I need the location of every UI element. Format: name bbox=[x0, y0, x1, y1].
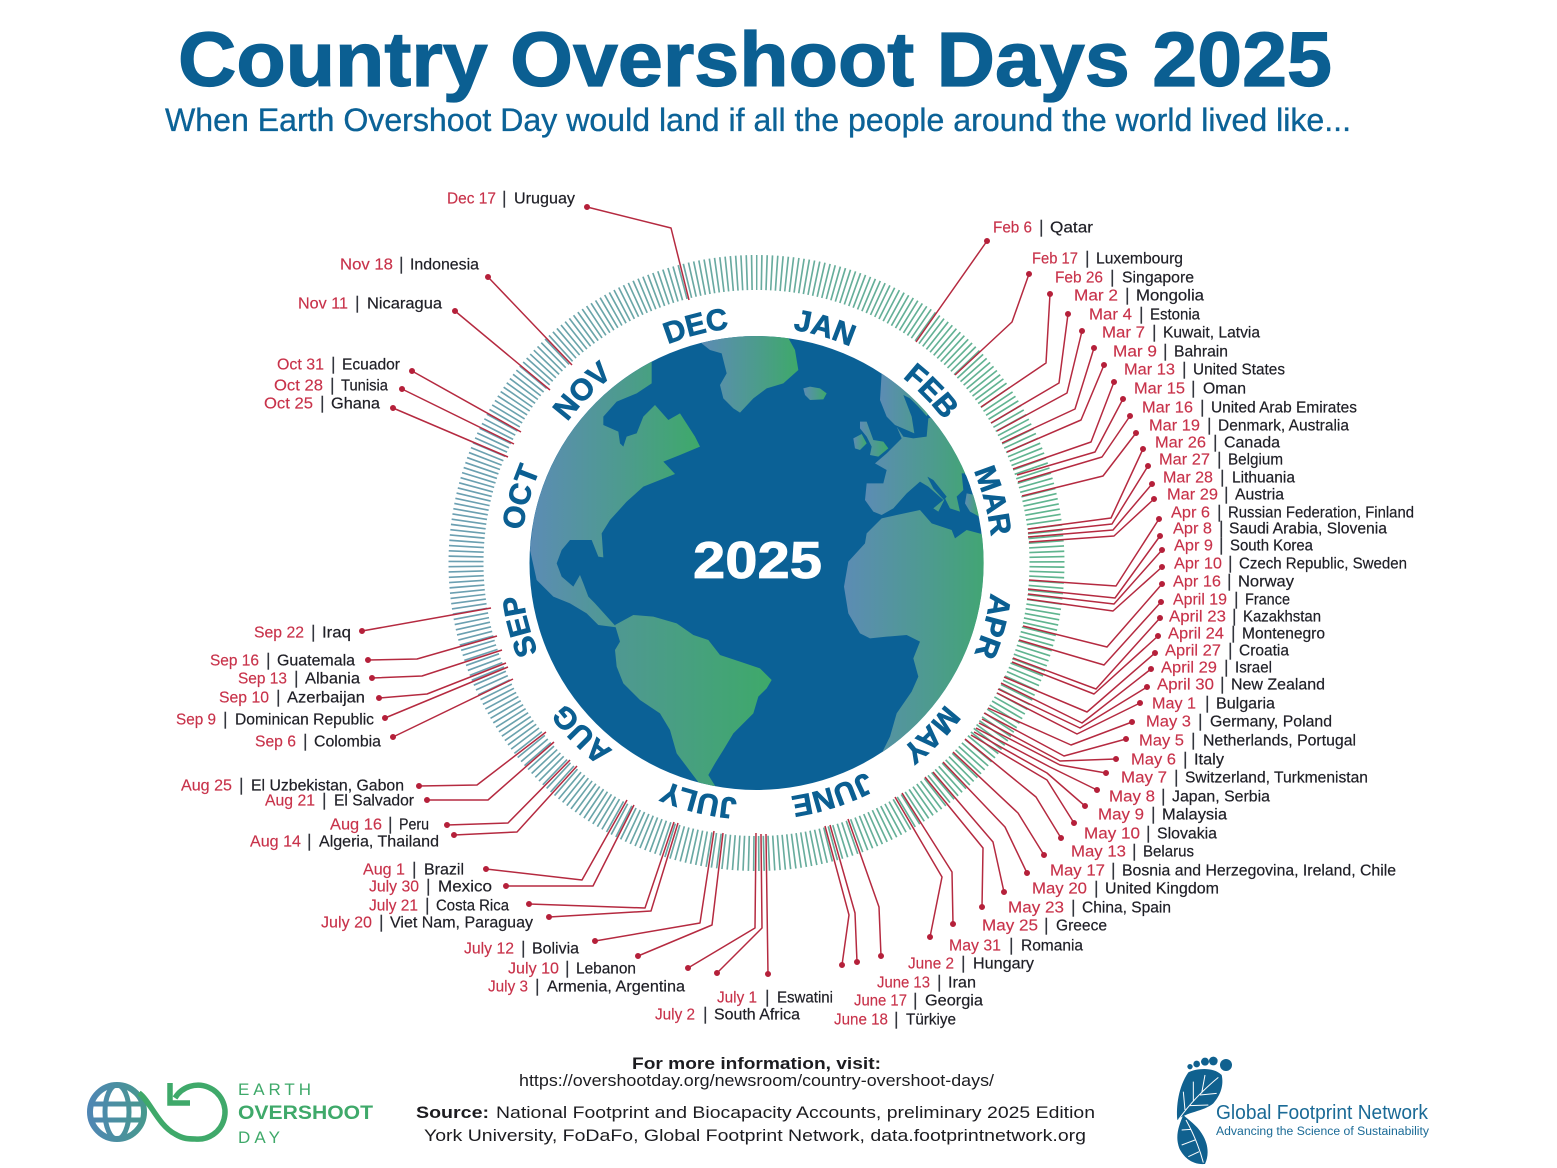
month: DEC: DEC bbox=[662, 308, 728, 344]
label: Sep 6 Colombia bbox=[255, 734, 381, 751]
sea: Adriatic bbox=[927, 477, 947, 500]
footer: more information: For more information, visit: bbox=[632, 1054, 881, 1073]
label: May 17 Bosnia and Herzegovina, Ireland, Chile: Bosnia and Herzegovina, Ireland, Chile bbox=[1122, 863, 1396, 880]
label: Sep 9 Dominican Republic: Dominican Republic bbox=[235, 712, 374, 729]
label: Mar 28 Lithuania bbox=[1163, 470, 1295, 487]
label: Mar 13 United States bbox=[1124, 362, 1285, 379]
label: May 20 United Kingdom: United Kingdom bbox=[1105, 881, 1219, 898]
label: July 20 Viet Nam, Paraguay: July 20 bbox=[321, 915, 372, 932]
label: May 20 United Kingdom bbox=[1032, 881, 1219, 898]
continent: Greenland bbox=[702, 330, 798, 413]
continent: Africa bbox=[844, 510, 984, 752]
label: July 2 South Africa: July 2 bbox=[655, 1007, 695, 1024]
label: Oct 28 Tunisia: Tunisia bbox=[341, 378, 388, 395]
label: April 27 Croatia: April 27 bbox=[1165, 643, 1221, 660]
label: Sep 16 Guatemala: Guatemala bbox=[277, 653, 355, 670]
label: Aug 25 El Uzbekistan, Gabon: El Uzbekistan, Gabon bbox=[251, 778, 404, 795]
label: Mar 9 Bahrain: Mar 9 bbox=[1113, 344, 1157, 361]
label: Dec 17 Uruguay: Dec 17 bbox=[447, 191, 496, 208]
label: Dec 17 Uruguay: Uruguay bbox=[514, 191, 575, 208]
label: Feb 26 Singapore: Feb 26 bbox=[1055, 270, 1103, 287]
label: July 12 Bolivia bbox=[464, 941, 579, 958]
label: May 7 Switzerland, Turkmenistan: Switzerland, Turkmenistan bbox=[1185, 770, 1368, 787]
month: OCT: OCT bbox=[503, 462, 538, 528]
label: July 30 Mexico: July 30 bbox=[369, 879, 419, 896]
label: Mar 19 Denmark, Australia bbox=[1149, 418, 1349, 435]
label: July 3 Armenia, Argentina: July 3 bbox=[488, 979, 528, 996]
footer: more information: https://overshootday.org/newsroom/country-overshoot-days/ bbox=[519, 1071, 994, 1090]
label: May 3 Germany, Poland: Germany, Poland bbox=[1210, 714, 1332, 731]
label: Mar 2 Mongolia: Mongolia bbox=[1136, 288, 1204, 305]
year label: 2025 bbox=[693, 532, 822, 590]
label: Oct 25 Ghana: Oct 25 bbox=[264, 396, 313, 413]
subtitle: When Earth Overshoot Day would land if all the people around the world lived like... bbox=[165, 102, 1351, 138]
label: Feb 17 Luxembourg: Feb 17 bbox=[1032, 251, 1078, 268]
month: JUNE: JUNE bbox=[791, 774, 870, 818]
label: May 6 Italy: Italy bbox=[1194, 752, 1224, 769]
label: Oct 31 Ecuador: Oct 31 bbox=[277, 357, 324, 374]
continent: Scandinavia bbox=[880, 374, 928, 434]
label: April 24 Montenegro bbox=[1168, 626, 1325, 643]
label: Mar 27 Belgium bbox=[1159, 452, 1283, 469]
label: May 31 Romania bbox=[949, 938, 1083, 955]
label: Sep 9 Dominican Republic bbox=[176, 712, 374, 729]
month: MAY: MAY bbox=[906, 705, 961, 766]
label: Sep 9 Dominican Republic: Sep 9 bbox=[176, 712, 216, 729]
label: May 7 Switzerland, Turkmenistan: May 7 bbox=[1121, 770, 1167, 787]
footer: source: National Footprint and Biocapacity Accounts, preliminary 2025 Edition bbox=[496, 1103, 1095, 1122]
logo wordmark bbox=[238, 1080, 373, 1147]
label: Sep 10 Azerbaijan: Sep 10 bbox=[219, 690, 269, 707]
label: Nov 11 Nicaragua: Nicaragua bbox=[367, 296, 442, 313]
label: Dec 17 Uruguay bbox=[447, 191, 575, 208]
continent: North America bbox=[530, 362, 700, 627]
logo: Global Footprint Network bbox=[1177, 1057, 1429, 1164]
label: May 5 Netherlands, Portugal: Netherlands, Portugal bbox=[1203, 733, 1356, 750]
label: July 21 Costa Rica bbox=[369, 898, 509, 915]
label: June 13 Iran bbox=[877, 975, 976, 992]
footer: source: Source: bbox=[416, 1103, 489, 1122]
label: July 10 Lebanon: July 10 bbox=[508, 961, 559, 978]
label: May 10 Slovakia: May 10 bbox=[1084, 826, 1140, 843]
label: Aug 25 El Uzbekistan, Gabon: Aug 25 bbox=[181, 778, 232, 795]
label: Sep 22 Iraq: Iraq bbox=[322, 625, 351, 642]
label: Apr 10 Czech Republic, Sweden: Apr 10 bbox=[1174, 556, 1222, 573]
label: Sep 10 Azerbaijan bbox=[219, 690, 365, 707]
label: June 2 Hungary: June 2 bbox=[908, 956, 954, 973]
label: Apr 6 Russian Federation, Finland: Russian Federation, Finland bbox=[1228, 505, 1414, 522]
label: April 19 France: France bbox=[1245, 592, 1290, 609]
land: Turkey bbox=[965, 493, 979, 517]
sea: Black Sea bbox=[966, 475, 971, 489]
label: May 8 Japan, Serbia: May 8 bbox=[1109, 789, 1155, 806]
label: June 2 Hungary: Hungary bbox=[973, 956, 1034, 973]
label: July 3 Armenia, Argentina: Armenia, Argentina bbox=[547, 979, 685, 996]
label: May 5 Netherlands, Portugal: May 5 bbox=[1139, 733, 1184, 750]
label: Sep 13 Albania bbox=[238, 671, 360, 688]
label: Aug 1 Brazil: Aug 1 bbox=[363, 862, 405, 879]
label: Apr 16 Norway bbox=[1173, 574, 1294, 591]
label: July 21 Costa Rica: Costa Rica bbox=[436, 898, 509, 915]
label: July 2 South Africa bbox=[655, 1007, 800, 1024]
label: April 19 France bbox=[1173, 592, 1290, 609]
label: Mar 29 Austria: Austria bbox=[1235, 487, 1284, 504]
label: May 8 Japan, Serbia: Japan, Serbia bbox=[1172, 789, 1270, 806]
label: April 27 Croatia: Croatia bbox=[1239, 643, 1289, 660]
month: APR: APR bbox=[974, 593, 1010, 658]
label: Mar 7 Kuwait, Latvia: Mar 7 bbox=[1102, 325, 1145, 342]
label: July 1 Eswatini: July 1 bbox=[717, 990, 757, 1007]
footer: source bbox=[416, 1103, 1095, 1145]
label: Aug 21 El Salvador: Aug 21 bbox=[265, 793, 315, 810]
label: May 9 Malaysia bbox=[1098, 807, 1227, 824]
label: July 1 Eswatini bbox=[717, 990, 833, 1007]
label: Nov 18 Indonesia: Nov 18 bbox=[340, 257, 393, 274]
continent: Europe bbox=[865, 418, 966, 515]
label: Mar 7 Kuwait, Latvia bbox=[1102, 325, 1260, 342]
label: Feb 17 Luxembourg bbox=[1032, 251, 1183, 268]
label: June 2 Hungary bbox=[908, 956, 1034, 973]
label: Mar 26 Canada bbox=[1155, 435, 1280, 452]
label: May 13 Belarus: May 13 bbox=[1071, 844, 1126, 861]
label: May 1 Bulgaria: May 1 bbox=[1152, 696, 1196, 713]
label: Mar 19 Denmark, Australia: Denmark, Australia bbox=[1218, 418, 1349, 435]
label: Mar 15 Oman: Mar 15 bbox=[1134, 381, 1185, 398]
label: April 23 Kazakhstan: April 23 bbox=[1169, 609, 1226, 626]
label: Sep 6 Colombia: Colombia bbox=[314, 734, 381, 751]
island: Ireland bbox=[853, 434, 867, 450]
label: Mar 9 Bahrain bbox=[1113, 344, 1228, 361]
label: Mar 16 United Arab Emirates bbox=[1142, 400, 1357, 417]
label: May 6 Italy bbox=[1131, 752, 1224, 769]
label: Mar 4 Estonia: Estonia bbox=[1150, 307, 1200, 324]
globe bbox=[530, 330, 1003, 790]
label: April 19 France: April 19 bbox=[1173, 592, 1227, 609]
logo tagline: Advancing the Science of Sustainability bbox=[1216, 1126, 1429, 1138]
label: June 13 Iran: June 13 bbox=[877, 975, 930, 992]
label: Mar 19 Denmark, Australia: Mar 19 bbox=[1149, 418, 1200, 435]
label: Feb 6 Qatar: Feb 6 bbox=[993, 220, 1032, 237]
label: Apr 16 Norway: Apr 16 bbox=[1173, 574, 1221, 591]
label: Mar 13 United States: United States bbox=[1193, 362, 1285, 379]
logo wordmark: OVERSHOOT bbox=[238, 1103, 373, 1124]
label: Mar 4 Estonia bbox=[1089, 307, 1200, 324]
label: Aug 25 El Uzbekistan, Gabon bbox=[181, 778, 404, 795]
label: Apr 8 Saudi Arabia, Slovenia: Apr 8 bbox=[1173, 521, 1212, 538]
label: Feb 6 Qatar bbox=[993, 220, 1093, 237]
logo wordmark: EARTH bbox=[238, 1080, 311, 1099]
label: May 9 Malaysia: Malaysia bbox=[1162, 807, 1227, 824]
label: May 8 Japan, Serbia bbox=[1109, 789, 1270, 806]
label: Mar 28 Lithuania: Mar 28 bbox=[1163, 470, 1213, 487]
label: May 13 Belarus: Belarus bbox=[1143, 844, 1194, 861]
label: May 10 Slovakia bbox=[1084, 826, 1217, 843]
leader line end dots bbox=[362, 207, 1162, 974]
label: Mar 27 Belgium: Mar 27 bbox=[1159, 452, 1210, 469]
label: April 23 Kazakhstan bbox=[1169, 609, 1321, 626]
label: May 9 Malaysia: May 9 bbox=[1098, 807, 1144, 824]
label: Sep 13 Albania: Sep 13 bbox=[238, 671, 287, 688]
label: May 31 Romania: May 31 bbox=[949, 938, 1001, 955]
label: Mar 15 Oman: Oman bbox=[1203, 381, 1246, 398]
label: Mar 28 Lithuania: Lithuania bbox=[1232, 470, 1295, 487]
label: April 23 Kazakhstan: Kazakhstan bbox=[1243, 609, 1321, 626]
label: April 27 Croatia bbox=[1165, 643, 1289, 660]
label: Sep 10 Azerbaijan: Azerbaijan bbox=[287, 690, 365, 707]
label: Aug 21 El Salvador bbox=[265, 793, 414, 810]
label: Sep 16 Guatemala: Sep 16 bbox=[210, 653, 259, 670]
label: June 17 Georgia bbox=[854, 993, 983, 1010]
label: Mar 16 United Arab Emirates: United Arab Emirates bbox=[1211, 400, 1357, 417]
logo wordmark: Global Footprint Network bbox=[1216, 1102, 1429, 1124]
label: Nov 18 Indonesia: Indonesia bbox=[410, 257, 479, 274]
label: Aug 1 Brazil bbox=[363, 862, 464, 879]
label: Aug 14 Algeria, Thailand bbox=[250, 834, 439, 851]
logo wordmark: DAY bbox=[238, 1128, 280, 1147]
footer: source: York University, FoDaFo, Global Footprint Network, data.footprintnetwork.org bbox=[424, 1126, 1086, 1145]
label: Mar 27 Belgium: Belgium bbox=[1228, 452, 1283, 469]
logo icon: footprint leaf bbox=[1177, 1057, 1232, 1164]
label: Aug 16 Peru: Peru bbox=[399, 817, 429, 834]
month labels bbox=[503, 308, 1011, 818]
label: Oct 25 Ghana: Ghana bbox=[331, 396, 380, 413]
label: Aug 1 Brazil: Brazil bbox=[424, 862, 464, 879]
label: May 1 Bulgaria: Bulgaria bbox=[1216, 696, 1275, 713]
label: July 20 Viet Nam, Paraguay bbox=[321, 915, 533, 932]
label: Aug 14 Algeria, Thailand: Aug 14 bbox=[250, 834, 301, 851]
label: Aug 16 Peru bbox=[330, 817, 429, 834]
month: FEB: FEB bbox=[904, 362, 957, 417]
label: April 30 New Zealand bbox=[1157, 677, 1325, 694]
label: Feb 26 Singapore: Singapore bbox=[1122, 270, 1194, 287]
label: July 30 Mexico: Mexico bbox=[438, 879, 492, 896]
label: Apr 10 Czech Republic, Sweden: Czech Republic, Sweden bbox=[1239, 556, 1407, 573]
leader lines bbox=[362, 207, 1162, 974]
label: Sep 13 Albania: Albania bbox=[305, 671, 360, 688]
label: July 10 Lebanon: Lebanon bbox=[576, 961, 636, 978]
label: May 3 Germany, Poland: May 3 bbox=[1146, 714, 1191, 731]
label: Oct 25 Ghana bbox=[264, 396, 380, 413]
label: May 23 China, Spain: China, Spain bbox=[1082, 900, 1171, 917]
label: Nov 11 Nicaragua bbox=[298, 296, 442, 313]
continent: South America bbox=[615, 615, 772, 788]
label: July 2 South Africa: South Africa bbox=[714, 1007, 800, 1024]
label: Mar 4 Estonia: Mar 4 bbox=[1089, 307, 1132, 324]
label: Oct 28 Tunisia bbox=[274, 378, 388, 395]
label: April 29 Israel bbox=[1161, 660, 1272, 677]
label: May 23 China, Spain: May 23 bbox=[1008, 900, 1064, 917]
label: Oct 31 Ecuador: Ecuador bbox=[342, 357, 400, 374]
label: June 17 Georgia: June 17 bbox=[854, 993, 907, 1010]
label: May 31 Romania: Romania bbox=[1021, 938, 1083, 955]
label: Apr 9 South Korea bbox=[1174, 538, 1313, 555]
label: Nov 11 Nicaragua: Nov 11 bbox=[298, 296, 348, 313]
label: July 21 Costa Rica: July 21 bbox=[369, 898, 418, 915]
label: July 3 Armenia, Argentina bbox=[488, 979, 685, 996]
label: May 10 Slovakia: Slovakia bbox=[1157, 826, 1217, 843]
label: July 12 Bolivia: July 12 bbox=[464, 941, 514, 958]
label: Mar 2 Mongolia bbox=[1074, 288, 1204, 305]
label: May 3 Germany, Poland bbox=[1146, 714, 1332, 731]
date labels bbox=[176, 191, 1414, 1029]
label: Mar 2 Mongolia: Mar 2 bbox=[1074, 288, 1118, 305]
label: April 24 Montenegro: Montenegro bbox=[1242, 626, 1325, 643]
island: Iceland bbox=[803, 387, 827, 400]
label: Aug 14 Algeria, Thailand: Algeria, Thailand bbox=[319, 834, 439, 851]
label: Aug 16 Peru: Aug 16 bbox=[330, 817, 382, 834]
label: Mar 26 Canada: Canada bbox=[1224, 435, 1280, 452]
label: July 10 Lebanon bbox=[508, 961, 636, 978]
label: July 30 Mexico bbox=[369, 879, 492, 896]
label: Mar 13 United States: Mar 13 bbox=[1124, 362, 1175, 379]
logo icon: globe and infinity loop bbox=[90, 1083, 225, 1139]
label: Nov 18 Indonesia bbox=[340, 257, 479, 274]
label: May 25 Greece bbox=[982, 918, 1107, 935]
label: May 1 Bulgaria bbox=[1152, 696, 1275, 713]
month: SEP: SEP bbox=[503, 598, 536, 657]
logo: Earth Overshoot Day bbox=[90, 1080, 373, 1147]
label: Mar 16 United Arab Emirates: Mar 16 bbox=[1142, 400, 1193, 417]
month: AUG: AUG bbox=[554, 706, 613, 762]
label: Feb 26 Singapore bbox=[1055, 270, 1194, 287]
label: Oct 28 Tunisia: Oct 28 bbox=[274, 378, 323, 395]
label: April 30 New Zealand: New Zealand bbox=[1231, 677, 1325, 694]
label: Oct 31 Ecuador bbox=[277, 357, 400, 374]
footer: more information bbox=[519, 1054, 994, 1090]
label: Feb 6 Qatar: Qatar bbox=[1050, 220, 1093, 237]
label: Sep 22 Iraq bbox=[254, 625, 351, 642]
label: Sep 22 Iraq: Sep 22 bbox=[254, 625, 304, 642]
label: June 18 Türkiye bbox=[834, 1012, 956, 1029]
label: Apr 16 Norway: Norway bbox=[1238, 574, 1294, 591]
label: Mar 15 Oman bbox=[1134, 381, 1246, 398]
title: Country Overshoot Days 2025 bbox=[178, 17, 1332, 103]
label: May 25 Greece: May 25 bbox=[982, 918, 1038, 935]
label: June 13 Iran: Iran bbox=[948, 975, 976, 992]
label: May 5 Netherlands, Portugal bbox=[1139, 733, 1356, 750]
label: July 12 Bolivia: Bolivia bbox=[532, 941, 579, 958]
label: Apr 9 South Korea: South Korea bbox=[1230, 538, 1313, 555]
island: Great Britain bbox=[860, 422, 888, 457]
label: June 18 Türkiye: Türkiye bbox=[906, 1012, 956, 1029]
label: July 20 Viet Nam, Paraguay: Viet Nam, Paraguay bbox=[390, 915, 533, 932]
label: May 25 Greece: Greece bbox=[1056, 918, 1107, 935]
month: MAR: MAR bbox=[974, 464, 1011, 536]
month: JAN: JAN bbox=[794, 310, 856, 346]
label: Apr 9 South Korea: Apr 9 bbox=[1174, 538, 1213, 555]
label: May 20 United Kingdom: May 20 bbox=[1032, 881, 1087, 898]
label: April 24 Montenegro: April 24 bbox=[1168, 626, 1224, 643]
label: June 17 Georgia: Georgia bbox=[925, 993, 983, 1010]
label: Sep 6 Colombia: Sep 6 bbox=[255, 734, 296, 751]
month: NOV: NOV bbox=[552, 359, 608, 421]
label: Mar 9 Bahrain: Bahrain bbox=[1174, 344, 1228, 361]
label: Mar 7 Kuwait, Latvia: Kuwait, Latvia bbox=[1163, 325, 1260, 342]
label: April 30 New Zealand: April 30 bbox=[1157, 677, 1214, 694]
label: July 1 Eswatini: Eswatini bbox=[777, 990, 833, 1007]
label: May 17 Bosnia and Herzegovina, Ireland, Chile: May 17 bbox=[1050, 863, 1105, 880]
label: May 23 China, Spain bbox=[1008, 900, 1171, 917]
label: Feb 17 Luxembourg: Luxembourg bbox=[1096, 251, 1183, 268]
month: JULY: JULY bbox=[658, 783, 736, 818]
label: Mar 29 Austria bbox=[1167, 487, 1284, 504]
label: May 13 Belarus bbox=[1071, 844, 1194, 861]
label: April 29 Israel: Israel bbox=[1235, 660, 1272, 677]
label: April 29 Israel: April 29 bbox=[1161, 660, 1217, 677]
label: Apr 6 Russian Federation, Finland: Apr 6 bbox=[1171, 505, 1210, 522]
label: Mar 29 Austria: Mar 29 bbox=[1167, 487, 1218, 504]
label: Mar 26 Canada: Mar 26 bbox=[1155, 435, 1206, 452]
label: Sep 16 Guatemala bbox=[210, 653, 355, 670]
label: Aug 21 El Salvador: El Salvador bbox=[334, 793, 414, 810]
tick ring: one tick per day bbox=[466, 272, 1047, 854]
label: May 6 Italy: May 6 bbox=[1131, 752, 1176, 769]
label: Apr 8 Saudi Arabia, Slovenia: Saudi Arabia, Slovenia bbox=[1229, 521, 1387, 538]
label: June 18 Türkiye: June 18 bbox=[834, 1012, 888, 1029]
